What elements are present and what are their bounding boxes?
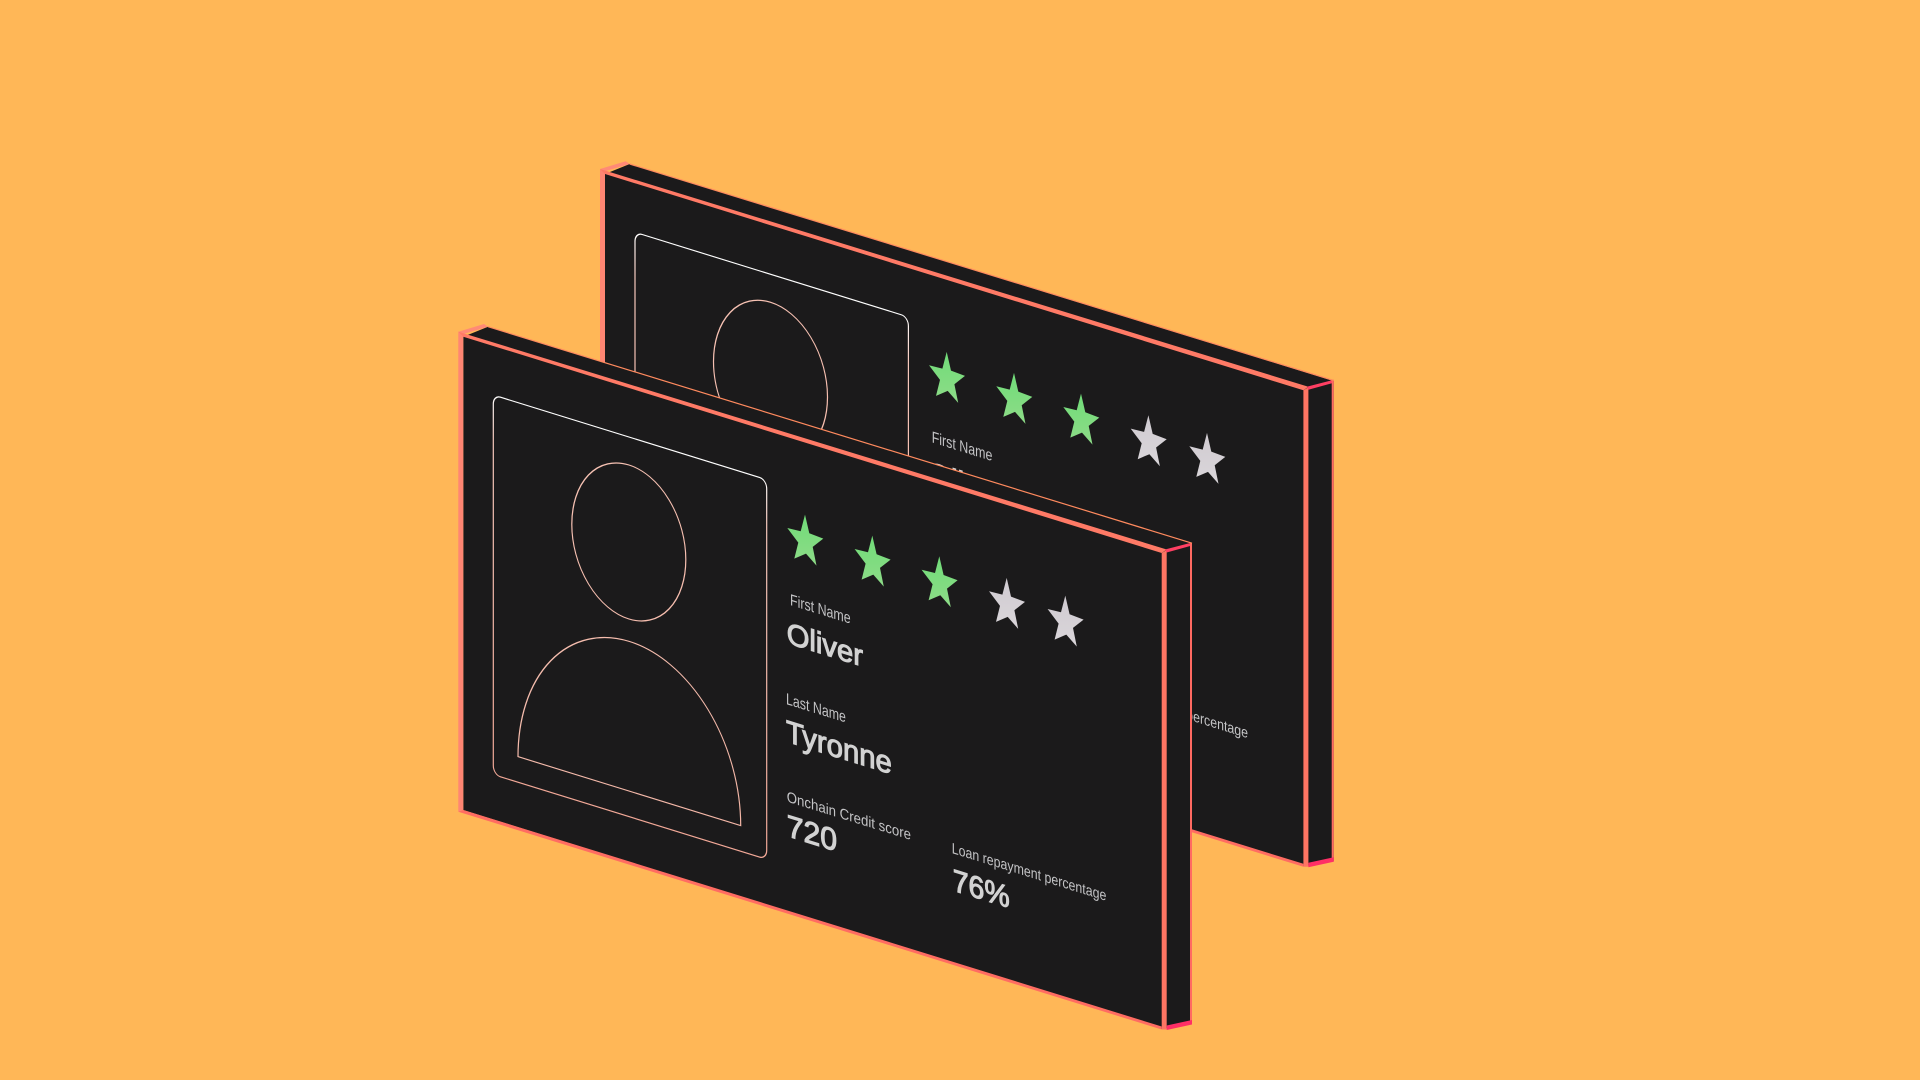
- front card photo panel: [493, 395, 767, 859]
- back card rating stars: [929, 352, 1225, 484]
- back avatar head: [714, 285, 828, 474]
- back card loan label: Loan repayment percentage: [1093, 677, 1248, 742]
- first name label: First Name: [790, 592, 851, 628]
- back avatar body: [660, 444, 882, 663]
- front card rating stars: [787, 515, 1084, 647]
- front card body: [458, 324, 1192, 1030]
- front avatar head: [572, 447, 686, 637]
- last name value: Tyronne: [786, 714, 892, 781]
- front card: [458, 324, 1192, 1030]
- credit score value: 720: [787, 808, 837, 858]
- credit score label: Onchain Credit score: [787, 788, 911, 843]
- front avatar body: [518, 607, 741, 826]
- back card photo panel: [635, 232, 908, 697]
- back card: [600, 161, 1334, 867]
- back card body: [600, 161, 1334, 867]
- first name value: Oliver: [787, 616, 863, 673]
- back card first name label: First Name: [932, 429, 992, 466]
- loan repayment value: 76%: [953, 863, 1010, 915]
- last name label: Last Name: [786, 691, 846, 727]
- back card first name value: Oliver: [928, 455, 1005, 513]
- loan repayment label: Loan repayment percentage: [952, 840, 1106, 904]
